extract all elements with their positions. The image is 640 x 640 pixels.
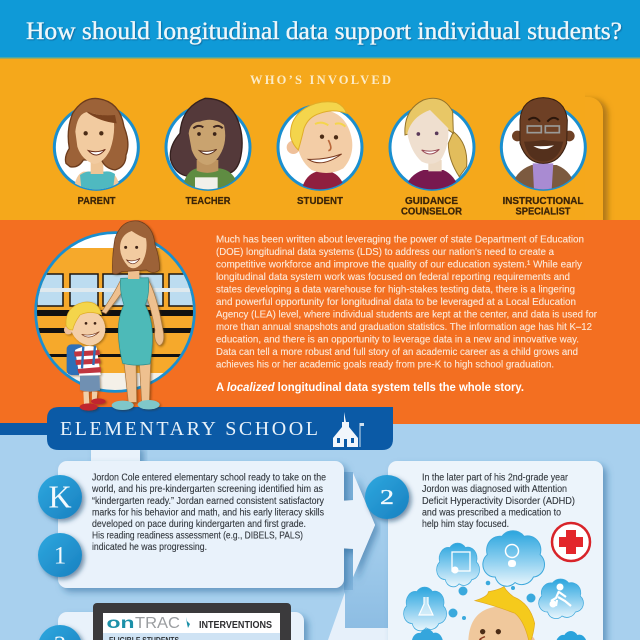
panel: grade 2: help him stay focused. <box>422 519 509 530</box>
tablet: ONTRAC interventions: INTERVENTIONS <box>199 619 272 631</box>
logo: ONTRAC <box>106 615 190 632</box>
role labels: INSTRUCTIONAL <box>502 195 584 207</box>
intro paragraph: (DOE) longitudinal data systems (LDS) to address our nation's need to create a <box>216 247 554 258</box>
step marker: K: K <box>48 478 72 514</box>
panel: who's involved <box>0 58 640 220</box>
intro paragraph <box>216 234 597 371</box>
intro paragraph: longitudinal data system work was focused on federal reporting requirements and <box>216 272 570 283</box>
heading: who's involved: WHO’S INVOLVED <box>250 73 391 87</box>
avatar: teacher <box>166 98 250 192</box>
connector: timeline flow <box>91 445 388 640</box>
panel: introduction <box>0 220 640 424</box>
panel: grades K and 1: indicated he was progressing. <box>92 542 207 553</box>
avatars <box>54 98 585 192</box>
intro paragraph: achieves his or her academic goals ready from pre-K to high school graduation. <box>216 360 554 371</box>
panel: grade 2: Jordon was diagnosed with Attention <box>422 484 567 495</box>
intro paragraph: more than annual snapshots and graduation statistics. The information age has hit K–12 <box>216 322 592 333</box>
cloud: tablet <box>437 543 480 587</box>
role labels: PARENT <box>78 195 116 207</box>
step marker: 2 <box>365 475 409 519</box>
thought bubbles <box>448 581 536 620</box>
connector band <box>0 423 60 435</box>
panel: grades K and 1: His reading readiness assessment (e.g., DIBELS, PALS) <box>92 530 303 542</box>
panel: grade 2: In the later part of his 2nd-grade year <box>422 472 568 484</box>
logo: ONTRAC: on <box>106 615 134 632</box>
intro paragraph: states developing a data warehouse for high-stakes testing data, there is a lingering <box>216 284 575 296</box>
avatar: guidance counselor <box>390 98 474 190</box>
illustration: mother and son <box>64 221 164 411</box>
intro paragraph: and powerful opportunity for longitudinal data to be leveraged at a Local Education <box>216 297 576 308</box>
cloud: running child <box>539 579 583 619</box>
cloud: lower right <box>553 631 589 640</box>
callout: localized system: A localized longitudinal data system tells the whole story. <box>216 380 524 394</box>
intro paragraph: Data can tell a more robust and full story of an academic career as a child grows and <box>216 347 578 358</box>
role labels <box>78 195 584 218</box>
thought clouds <box>404 531 589 640</box>
panel: grade 2 <box>388 461 603 640</box>
cloud: lower left <box>409 629 445 640</box>
step marker: K <box>38 475 82 519</box>
mother <box>102 221 164 410</box>
panel: grades K and 1 <box>58 461 375 588</box>
section banner: elementary school <box>47 407 393 450</box>
illustration: Jordon thinking <box>468 587 535 640</box>
cloud: flask <box>404 587 447 631</box>
panel: grades K and 1: world, and his pre-kindergarten screening identified him as <box>91 484 323 495</box>
intro paragraph: education, and there is an opportunity to leverage data in a new and innovative way. <box>216 335 579 346</box>
section banner: elementary school: ELEMENTARY SCHOOL <box>60 418 318 440</box>
avatar: parent <box>54 98 138 192</box>
role labels: SPECIALIST <box>516 206 571 218</box>
intro paragraph: Agency (LEA) level, where individual students are kept at the center, and data is used for <box>216 310 597 321</box>
title banner: How should longitudinal data support individual students? <box>26 16 622 45</box>
role labels: COUNSELOR <box>401 206 462 218</box>
title banner <box>0 0 640 58</box>
step marker: 3 <box>38 625 82 640</box>
cloud: light bulb <box>483 531 545 586</box>
panel: grade 3 <box>58 612 304 640</box>
step marker: 2: 2 <box>380 485 394 509</box>
intro paragraph: competitive workforce and improve the quality of our education system.¹ While early <box>216 260 583 270</box>
tablet: ONTRAC interventions <box>93 603 291 640</box>
panel: grades K and 1: “kindergarten ready.” Jordan earned consistent satisfactory <box>92 496 325 507</box>
school bus scene <box>30 233 200 393</box>
avatar: instructional specialist <box>501 98 585 190</box>
icon: schoolhouse <box>333 412 364 447</box>
logo: ONTRAC: TRAC <box>135 615 180 632</box>
icon: medical cross <box>552 523 590 561</box>
step marker: 1 <box>38 533 82 577</box>
step marker: 1: 1 <box>54 542 66 570</box>
avatar: student <box>278 102 362 190</box>
role labels: STUDENT <box>297 195 344 207</box>
boy <box>64 302 106 411</box>
panel: grades K and 1: Jordon Cole entered elementary school ready to take on the <box>92 472 326 484</box>
intro paragraph: Much has been written about leveraging the power of state Department of Education <box>216 234 584 246</box>
panel: grades K and 1: marks for his behavior and math, and his early literacy skills <box>92 507 324 518</box>
panel: grade 2: Deficit Hyperactivity Disorder (ADHD) <box>422 496 575 507</box>
panel: grades K and 1: developed on pace during kindergarten and first grade. <box>92 519 306 530</box>
panel: grade 2: and was prescribed a medication to <box>422 507 561 518</box>
role labels: GUIDANCE <box>405 195 458 207</box>
role labels: TEACHER <box>186 195 231 207</box>
